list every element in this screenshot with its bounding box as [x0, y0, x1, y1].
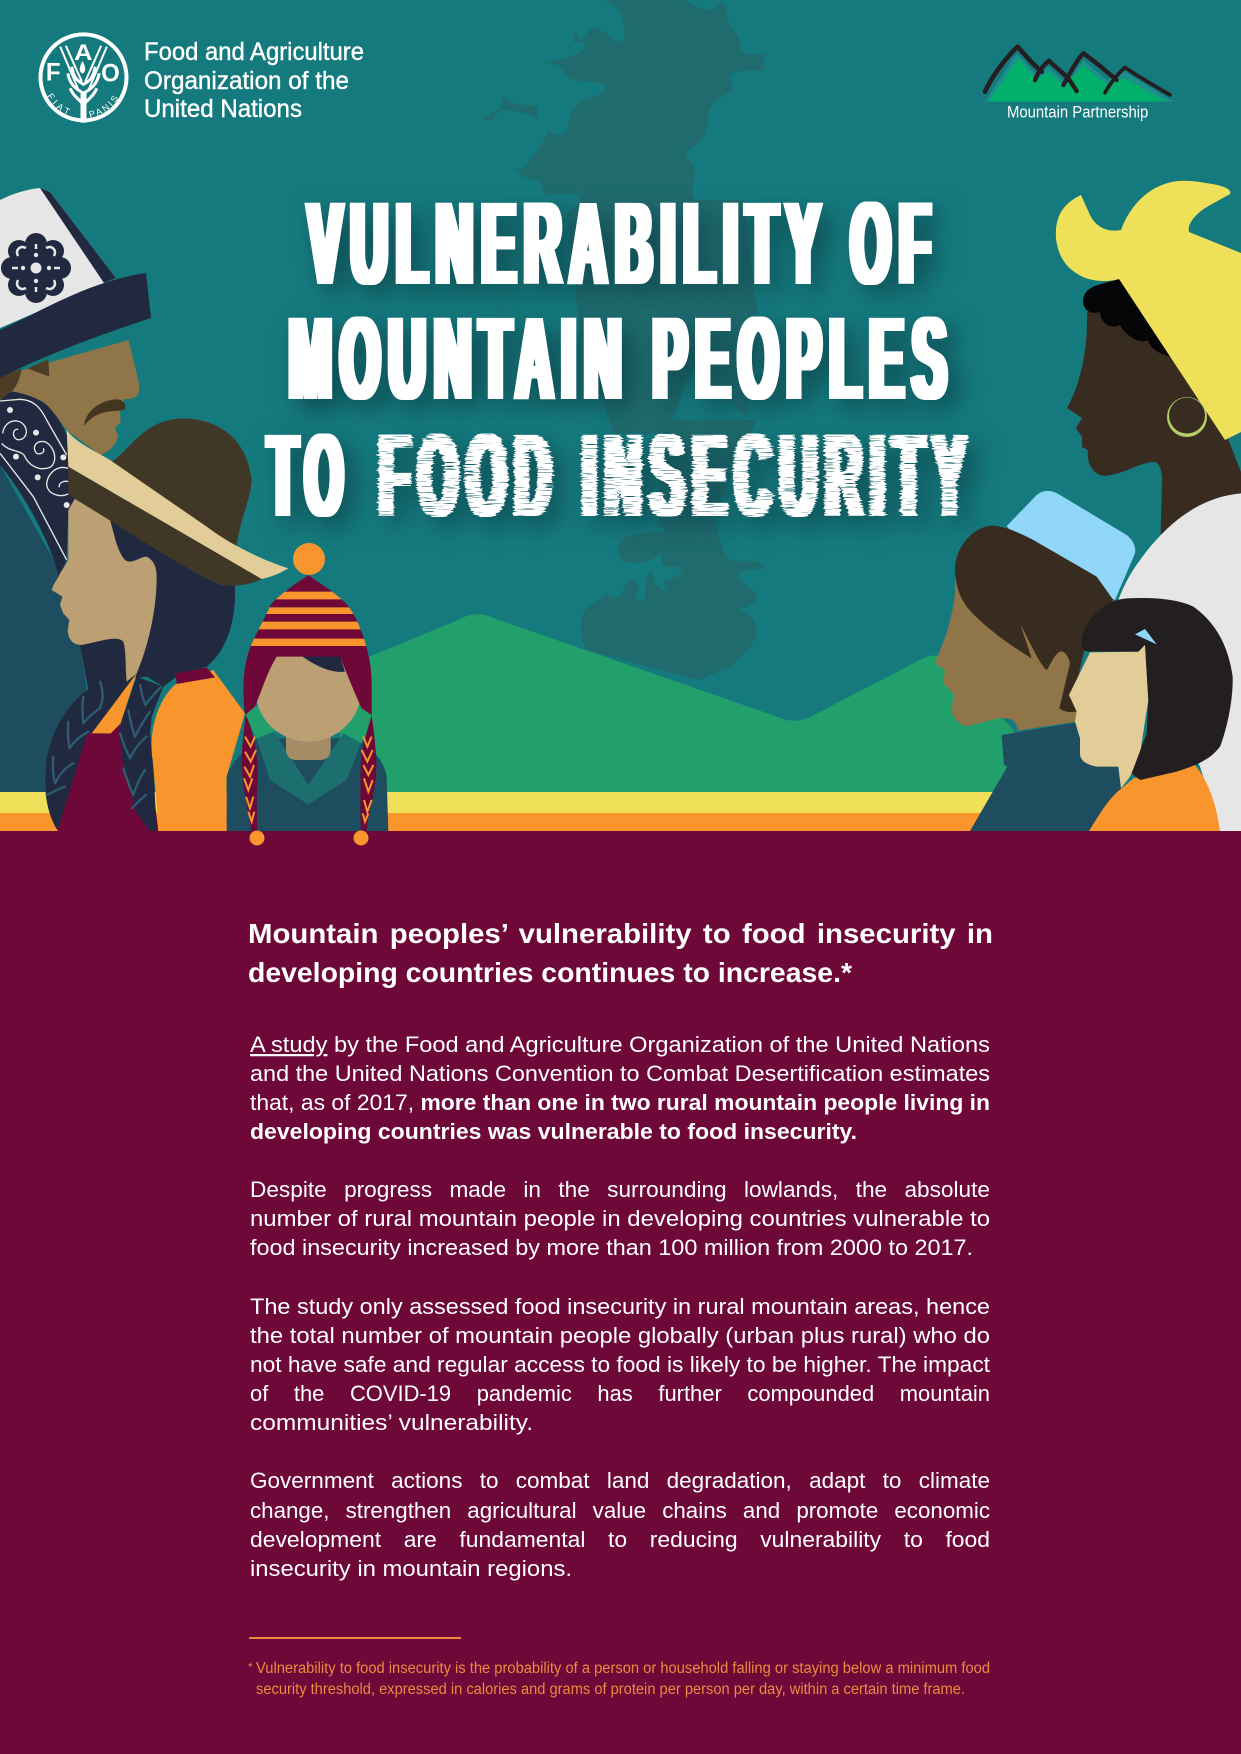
paragraph 1: that, as of 2017, more than one in two rural mountain people living in: [250, 1090, 990, 1115]
yellow headwrap: [1056, 181, 1241, 440]
woman orange panel: [92, 673, 137, 733]
child fringe: [302, 656, 345, 672]
paragraph 4: [250, 1468, 990, 1581]
paragraph 4: Government actions to combat land degradation, adapt to climate: [250, 1468, 990, 1493]
FAO name: [144, 38, 364, 123]
paragraph 2: Despite progress made in the surrounding lowlands, the absolute: [250, 1177, 990, 1202]
woman hat crown: [112, 418, 252, 546]
FAO name: Food and Agriculture: [144, 38, 364, 66]
FAO emblem: FIAT: [48, 93, 70, 114]
headwrap woman face and neck: [1067, 285, 1241, 560]
paragraph 1: developing countries was vulnerable to food insecurity.: [250, 1119, 857, 1144]
person: man in kalpak hat: [0, 188, 151, 578]
logo: Mountain Partnership: [985, 47, 1173, 121]
child braid pompoms: [250, 830, 368, 846]
man moustache: [84, 399, 125, 426]
woman right braid: [119, 677, 163, 831]
blue hair clip: [1135, 629, 1157, 644]
paragraph 3: [250, 1294, 991, 1435]
orange top: [1089, 765, 1220, 831]
braid leaf marks: [47, 682, 161, 808]
paragraph 3: of the COVID-19 pandemic has further compounded mountain: [250, 1381, 990, 1406]
paragraph 4: change, strengthen agricultural value chains and promote economic: [250, 1498, 990, 1523]
paragraph 4: development are fundamental to reducing vulnerability to food: [250, 1527, 990, 1552]
paragraph 3: not have safe and regular access to food is likely to be higher. The impact: [250, 1352, 991, 1377]
woman hat lower brim: [68, 467, 262, 586]
yellow band: [0, 792, 993, 813]
green mountain range: [340, 614, 1040, 800]
person: child in striped hat: [227, 543, 388, 833]
lead statement: Mountain peoples’ vulnerability to food insecurity in: [248, 918, 993, 949]
child pompom: [293, 543, 325, 575]
kalpak hat stripe: [40, 188, 116, 283]
text panel: [248, 918, 993, 1698]
logo: FAO emblem and name: [38, 32, 364, 123]
woman hair: [80, 520, 235, 690]
paragraph 2: [250, 1177, 990, 1260]
child right braid: [360, 715, 376, 833]
child face: [256, 656, 360, 742]
person: woman in yellow headwrap: [1056, 181, 1241, 560]
person: woman in brimmed hat: [45, 418, 288, 831]
child scarf: [245, 706, 372, 743]
footnote: [248, 1660, 990, 1698]
FAO emblem: PANIS: [89, 96, 118, 118]
white robe: [1118, 493, 1241, 831]
man embroidered collar: [0, 392, 77, 578]
child left braid: [242, 715, 258, 833]
gold hoop earring: [1167, 397, 1207, 437]
footnote divider: [249, 1637, 461, 1639]
kalpak hat crown: [0, 188, 116, 328]
logo green peaks: [988, 58, 1167, 102]
paragraph 3: the total number of mountain people globally (urban plus rural) who do: [250, 1323, 990, 1348]
paragraph 3: communities’ vulnerability.: [250, 1410, 533, 1435]
man face: [0, 340, 139, 455]
FAO emblem: O: [101, 61, 120, 88]
paragraph 3: The study only assessed food insecurity in rural mountain areas, hence: [250, 1294, 990, 1319]
woman maroon collar: [176, 667, 215, 684]
main title: TO: [268, 410, 351, 542]
main title: [268, 178, 975, 542]
lead statement: [248, 918, 993, 988]
child neck: [286, 736, 331, 760]
blue cap: [1007, 491, 1135, 600]
braid chevrons: [244, 737, 373, 822]
man: body: [0, 465, 87, 800]
child sweater collar: [257, 732, 362, 804]
woman dress: [57, 723, 158, 831]
paragraph 2: food insecurity increased by more than 100 million from 2000 to 2017.: [250, 1235, 973, 1260]
paragraph 1: and the United Nations Convention to Combat Desertification estimates: [250, 1061, 990, 1086]
paragraph 1: [250, 1032, 990, 1144]
child hat stripes: [250, 592, 366, 646]
kalpak hat band: [0, 273, 151, 378]
footnote: *: [248, 1660, 253, 1674]
people: boy and girl on the right: [935, 491, 1241, 831]
banner background: [0, 0, 1241, 831]
footnote: security threshold, expressed in calories and grams of protein per person per day, within a certain time frame.: [256, 1681, 965, 1698]
kalpak medallion: [1, 233, 71, 303]
boy face: [935, 577, 1077, 731]
child sweater: [227, 738, 388, 832]
girl hair: [1081, 598, 1233, 780]
paragraph 4: insecurity in mountain regions.: [250, 1556, 572, 1581]
woman hat cream band: [67, 430, 288, 579]
logo black ridges: [985, 47, 1170, 95]
child hat: [243, 575, 372, 715]
paragraph 2: number of rural mountain people in developing countries vulnerable to: [250, 1206, 990, 1231]
logo name: Mountain Partnership: [1007, 102, 1148, 121]
woman orange shoulder: [152, 670, 245, 813]
illustrated banner: [0, 0, 1241, 833]
lead statement: developing countries continues to increase.*: [248, 957, 852, 988]
woman left braid: [45, 673, 137, 830]
FAO name: Organization of the: [144, 67, 349, 95]
yellow and orange ground bands: [0, 792, 1241, 831]
man hair: [0, 359, 49, 399]
FAO emblem: A: [74, 40, 93, 65]
background map silhouette: [483, 0, 767, 680]
woman face: [52, 497, 157, 682]
black curly hair: [1083, 279, 1176, 358]
FAO emblem: F: [46, 59, 60, 86]
girl face: [1069, 645, 1148, 788]
logo shadow peaks: [985, 53, 1173, 102]
FAO name: United Nations: [144, 95, 302, 123]
orange band: [0, 813, 1241, 831]
FAO emblem: [38, 32, 128, 123]
boy hair: [955, 526, 1113, 712]
paragraph 1: A study by the Food and Agriculture Organization of the United Nations: [250, 1032, 990, 1057]
boy coat: [970, 723, 1122, 831]
footnote: Vulnerability to food insecurity is the probability of a person or household falling or staying below a minimum food: [256, 1660, 990, 1677]
